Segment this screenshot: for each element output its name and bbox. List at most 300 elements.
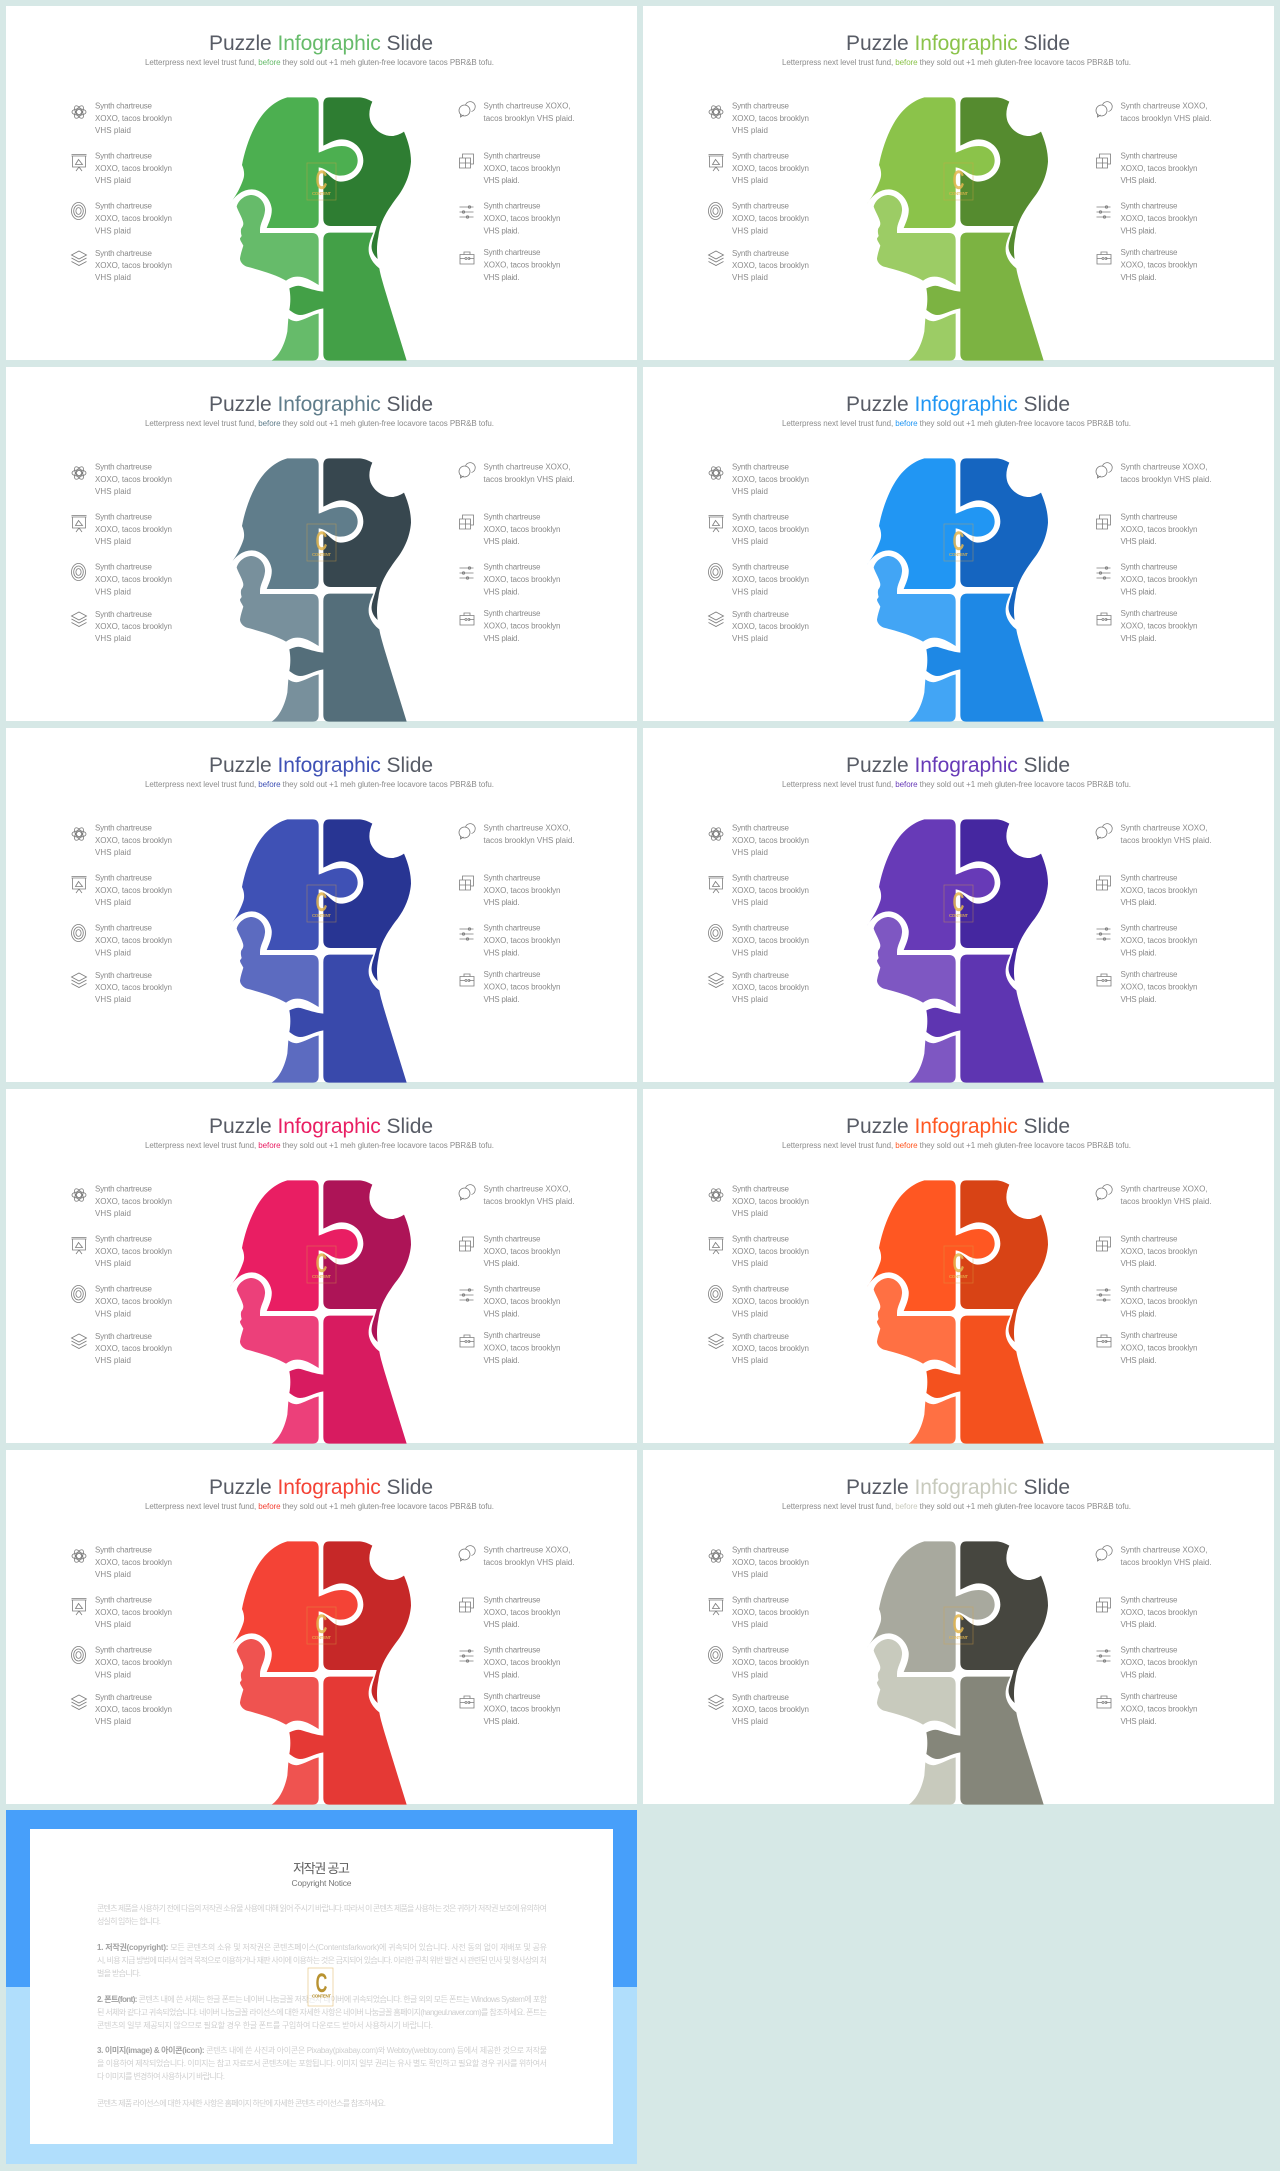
right item 2: XOXO, tacos brooklyn (484, 886, 560, 895)
right item 2: XOXO, tacos brooklyn (1120, 525, 1198, 534)
panel: copyright notice (6, 1810, 637, 2164)
left item 2: VHS plaid (732, 1259, 768, 1268)
title: Puzzle Infographic Slide (846, 32, 1070, 55)
right item 4: Synth chartreuse (1120, 1692, 1178, 1701)
left item 3: XOXO, tacos brooklyn (732, 1658, 809, 1667)
right item 2 (1096, 152, 1198, 185)
left item 3: VHS plaid (732, 1670, 768, 1680)
left item 2 (708, 874, 809, 907)
right item 3: Synth chartreuse (484, 202, 541, 210)
left item 4 (708, 610, 809, 643)
left item 2: Synth chartreuse (732, 512, 790, 522)
right item 1: tacos brooklyn VHS plaid. (1120, 1558, 1212, 1567)
watermark: CONTENT (312, 552, 331, 557)
subtitle: Letterpress next level trust fund, before they sold out +1 meh gluten-free locavore tacos PBR&B tofu. (145, 780, 494, 789)
panel: slide 7 pink (6, 1089, 637, 1444)
right item 1: Synth chartreuse XOXO, (484, 1546, 570, 1554)
right item 2 (1096, 1596, 1198, 1629)
left item 1 (72, 102, 172, 135)
left item 3: XOXO, tacos brooklyn (732, 1297, 809, 1306)
subtitle: Letterpress next level trust fund, before they sold out +1 meh gluten-free locavore tacos PBR&B tofu. (782, 58, 1131, 67)
left item 3: XOXO, tacos brooklyn (95, 214, 172, 223)
left item 1: XOXO, tacos brooklyn (732, 475, 809, 484)
watermark (944, 1607, 973, 1644)
right item 2: Synth chartreuse (484, 1596, 541, 1604)
left item 4 (708, 249, 809, 282)
right item 1 (459, 824, 574, 845)
left item 2: XOXO, tacos brooklyn (95, 1247, 172, 1256)
right item 4: VHS plaid. (1120, 995, 1156, 1004)
right item 1: Synth chartreuse XOXO, (484, 462, 570, 472)
left item 1: Synth chartreuse (95, 102, 153, 110)
left item 2: XOXO, tacos brooklyn (732, 1608, 809, 1617)
watermark: CONTENT (949, 552, 968, 557)
left item 1: Synth chartreuse (95, 1184, 153, 1194)
left item 4: Synth chartreuse (732, 610, 790, 619)
notice section 3: 을 이용하여 제작되었습니다. 이미지는 참고 자료로서 콘텐츠에는 포함됩니다. 이미지 일부 권리는 유사 별도 확인하고 필요할 경우 귀사를 위하여서 (97, 2058, 547, 2068)
left item 2 (708, 512, 809, 546)
right item 3 (1096, 1284, 1198, 1318)
right item 4: Synth chartreuse (484, 1331, 541, 1340)
left item 4: XOXO, tacos brooklyn (732, 1705, 809, 1714)
left item 1 (72, 1184, 172, 1218)
left item 2: Synth chartreuse (732, 874, 790, 882)
right item 4: Synth chartreuse (484, 1692, 541, 1701)
panel: slide 5 indigo (6, 728, 637, 1083)
subtitle: Letterpress next level trust fund, before they sold out +1 meh gluten-free locavore tacos PBR&B tofu. (782, 780, 1131, 789)
right item 4: XOXO, tacos brooklyn (1120, 982, 1198, 992)
right item 4: Synth chartreuse (484, 609, 541, 618)
right item 2: XOXO, tacos brooklyn (1120, 164, 1198, 173)
right item 3: Synth chartreuse (1120, 924, 1178, 932)
left item 4 (72, 1332, 172, 1365)
left item 1 (72, 824, 172, 857)
title: Puzzle Infographic Slide (209, 1115, 433, 1138)
right item 4 (460, 1331, 560, 1365)
right item 4: VHS plaid. (1120, 1717, 1156, 1726)
right item 1 (459, 102, 574, 123)
head puzzle (230, 458, 411, 722)
right item 4: Synth chartreuse (1120, 1331, 1178, 1340)
left item 3: Synth chartreuse (732, 924, 790, 932)
panel: slide 10 warm grey (643, 1450, 1274, 1805)
right item 3: XOXO, tacos brooklyn (1120, 936, 1198, 945)
watermark (944, 885, 973, 922)
watermark (307, 163, 336, 200)
head puzzle (867, 1180, 1048, 1444)
left item 2: VHS plaid (732, 898, 768, 907)
left item 3 (708, 924, 809, 958)
right item 1: Synth chartreuse XOXO, (484, 1184, 570, 1194)
watermark: C (953, 526, 964, 556)
right item 2: Synth chartreuse (1120, 1234, 1178, 1244)
title: Puzzle Infographic Slide (846, 393, 1070, 416)
right item 3: XOXO, tacos brooklyn (484, 1297, 560, 1306)
right item 2 (1096, 874, 1198, 907)
right item 1: tacos brooklyn VHS plaid. (1120, 475, 1212, 484)
left item 1: VHS plaid (95, 1209, 131, 1218)
left item 1 (709, 102, 809, 135)
right item 2: VHS plaid. (484, 1259, 520, 1268)
right item 3: Synth chartreuse (1120, 1284, 1178, 1294)
left item 1: VHS plaid (95, 126, 131, 135)
right item 1 (1096, 462, 1212, 484)
right item 4: XOXO, tacos brooklyn (1120, 260, 1198, 270)
left item 2: XOXO, tacos brooklyn (95, 164, 172, 173)
right item 2: VHS plaid. (484, 537, 520, 546)
subtitle: Letterpress next level trust fund, before they sold out +1 meh gluten-free locavore tacos PBR&B tofu. (145, 58, 494, 67)
left item 2 (708, 1596, 809, 1629)
right item 4: XOXO, tacos brooklyn (484, 1704, 560, 1714)
right item 3: XOXO, tacos brooklyn (1120, 1658, 1198, 1667)
left item 2: Synth chartreuse (732, 1234, 790, 1244)
left item 4: XOXO, tacos brooklyn (95, 1344, 172, 1353)
left item 1: XOXO, tacos brooklyn (732, 836, 809, 845)
right item 3: Synth chartreuse (1120, 202, 1178, 210)
watermark (307, 524, 336, 561)
watermark: CONTENT (312, 913, 331, 918)
right item 3: XOXO, tacos brooklyn (1120, 1297, 1198, 1306)
left item 1: VHS plaid (95, 848, 131, 857)
notice intro (97, 1903, 547, 1926)
left item 1: Synth chartreuse (732, 462, 790, 472)
left item 3 (72, 1284, 172, 1318)
left item 3 (72, 562, 172, 596)
watermark: CONTENT (949, 913, 968, 918)
left item 1 (709, 462, 809, 496)
title: Puzzle Infographic Slide (209, 754, 433, 777)
left item 3: VHS plaid (732, 1310, 768, 1318)
left item 4: VHS plaid (95, 1356, 131, 1365)
left item 1: VHS plaid (732, 848, 768, 857)
notice intro: 콘텐츠 제품을 사용하기 전에 다음의 저작권 소유물 사용에 대해 읽어 주시기 바랍니다. 따라서 이 콘텐츠 제품을 사용하는 것은 귀하가 저작권 보호에 유의하여 (97, 1903, 547, 1913)
right item 2: VHS plaid. (1120, 1259, 1156, 1268)
left item 1 (709, 1546, 809, 1579)
left item 4 (708, 1693, 809, 1726)
title: Puzzle Infographic Slide (846, 1115, 1070, 1138)
watermark (307, 885, 336, 922)
right item 1 (1096, 824, 1212, 845)
panel: slide 1 green (6, 6, 637, 361)
right item 4 (460, 248, 560, 282)
left item 1: XOXO, tacos brooklyn (95, 1197, 172, 1206)
right item 2 (460, 1234, 560, 1268)
left item 2: VHS plaid (95, 1620, 131, 1629)
left item 4: VHS plaid (95, 1717, 131, 1726)
left item 1: XOXO, tacos brooklyn (95, 114, 172, 123)
watermark: CONTENT (312, 1994, 331, 1998)
notice title: 저작권 공고 (293, 1861, 350, 1876)
right item 3: Synth chartreuse (484, 1646, 541, 1654)
left item 3: VHS plaid (95, 588, 131, 596)
title: Puzzle Infographic Slide (209, 32, 433, 55)
left item 3: Synth chartreuse (95, 924, 153, 932)
right item 1: tacos brooklyn VHS plaid. (484, 836, 574, 845)
right item 2 (460, 874, 560, 907)
right item 3: XOXO, tacos brooklyn (1120, 214, 1198, 223)
left item 3 (72, 924, 172, 958)
right item 4 (1097, 609, 1198, 643)
left item 3: Synth chartreuse (732, 562, 790, 572)
left item 4 (708, 971, 809, 1004)
right item 4: VHS plaid. (484, 1717, 520, 1726)
left item 1: VHS plaid (732, 1209, 768, 1218)
right item 1 (459, 1546, 574, 1567)
left item 2 (72, 152, 172, 185)
watermark: C (316, 1609, 327, 1639)
watermark: CONTENT (949, 191, 968, 196)
right item 2: XOXO, tacos brooklyn (484, 525, 560, 534)
left item 2: Synth chartreuse (95, 512, 153, 522)
right item 4 (1097, 1331, 1198, 1365)
right item 2 (460, 512, 560, 546)
notice intro: 성실히 임하는 합니다. (97, 1916, 161, 1926)
notice section 3 (97, 2045, 547, 2081)
left item 1: VHS plaid (732, 126, 768, 135)
left item 3 (72, 202, 172, 236)
left item 1: VHS plaid (95, 487, 131, 496)
right item 3: VHS plaid. (1120, 948, 1156, 958)
right item 2: VHS plaid. (484, 1620, 520, 1629)
right item 3: VHS plaid. (1120, 588, 1156, 596)
left item 4 (72, 1693, 172, 1726)
right item 4 (460, 609, 560, 643)
left item 1: XOXO, tacos brooklyn (732, 114, 809, 123)
right item 1: Synth chartreuse XOXO, (1120, 462, 1208, 472)
right item 1 (459, 1184, 574, 1206)
left item 2: VHS plaid (732, 537, 768, 546)
left item 4: XOXO, tacos brooklyn (732, 622, 809, 631)
title: Puzzle Infographic Slide (846, 754, 1070, 777)
right item 1: Synth chartreuse XOXO, (1120, 1184, 1208, 1194)
notice section 2 (97, 1994, 548, 2030)
right item 2: XOXO, tacos brooklyn (1120, 1608, 1198, 1617)
right item 3: VHS plaid. (484, 588, 520, 596)
left item 2: VHS plaid (95, 537, 131, 546)
subtitle: Letterpress next level trust fund, before they sold out +1 meh gluten-free locavore tacos PBR&B tofu. (145, 419, 494, 428)
right item 2: Synth chartreuse (1120, 152, 1178, 160)
left item 3: XOXO, tacos brooklyn (95, 1297, 172, 1306)
left item 1 (709, 824, 809, 857)
left item 1: Synth chartreuse (732, 102, 790, 110)
right item 4: Synth chartreuse (1120, 248, 1178, 257)
left item 2: Synth chartreuse (732, 152, 790, 160)
right item 2: VHS plaid. (1120, 898, 1156, 907)
watermark: C (953, 1609, 964, 1639)
right item 4: VHS plaid. (484, 995, 520, 1004)
left item 2: Synth chartreuse (95, 1234, 153, 1244)
left item 3 (708, 562, 809, 596)
left item 3: Synth chartreuse (95, 1646, 153, 1654)
left item 4: VHS plaid (732, 273, 768, 282)
right item 1: Synth chartreuse XOXO, (1120, 102, 1208, 110)
watermark: CONTENT (949, 1635, 968, 1640)
head puzzle (867, 458, 1048, 722)
left item 1 (72, 462, 172, 496)
right item 3: VHS plaid. (1120, 1310, 1156, 1318)
right item 1: tacos brooklyn VHS plaid. (1120, 1197, 1212, 1206)
left item 3 (72, 1646, 172, 1680)
right item 3 (460, 924, 560, 958)
watermark: C (316, 526, 327, 556)
right item 2: XOXO, tacos brooklyn (484, 1608, 560, 1617)
right item 4: Synth chartreuse (1120, 970, 1178, 979)
left item 2: VHS plaid (95, 898, 131, 907)
head puzzle (230, 1180, 411, 1444)
left item 4: Synth chartreuse (732, 1693, 790, 1702)
left item 4: Synth chartreuse (95, 610, 153, 619)
right item 1: tacos brooklyn VHS plaid. (484, 114, 574, 123)
left item 2: VHS plaid (95, 1259, 131, 1268)
left item 3 (708, 1284, 809, 1318)
subtitle: Letterpress next level trust fund, before they sold out +1 meh gluten-free locavore tacos PBR&B tofu. (782, 1502, 1131, 1511)
right item 1: Synth chartreuse XOXO, (484, 102, 570, 110)
notice section 1: 벌을 받습니다. (97, 1968, 141, 1978)
left item 3: VHS plaid (732, 226, 768, 236)
right item 1: tacos brooklyn VHS plaid. (484, 475, 574, 484)
notice section 1: 1. 저작권(copyright): 모든 콘텐츠의 소유 및 저작권은 콘텐츠페이스(Contentsfarkwork)에 귀속되어 있습니다. 사전 동의 없이 재배포 및 공유 (97, 1942, 547, 1952)
left item 3: Synth chartreuse (732, 1646, 790, 1654)
right item 2: XOXO, tacos brooklyn (1120, 1247, 1198, 1256)
right item 4: Synth chartreuse (1120, 609, 1178, 618)
right item 2: VHS plaid. (1120, 537, 1156, 546)
right item 4 (1097, 1692, 1198, 1726)
watermark: C (953, 887, 964, 917)
left item 2: VHS plaid (732, 176, 768, 185)
left item 4: Synth chartreuse (732, 249, 790, 258)
right item 3 (1096, 1646, 1198, 1680)
left item 1: Synth chartreuse (95, 1546, 153, 1554)
left item 4: VHS plaid (732, 995, 768, 1004)
right item 1 (1096, 1184, 1212, 1206)
left item 1: Synth chartreuse (95, 824, 153, 832)
notice section 2: 2. 폰트(font): 콘텐츠 내에 쓴 서체는 한글 폰트는 네이버 나눔글꼴 저작권자 네이버에 귀속되었습니다. 한글 외의 모든 폰트는 Windows System에 포함 (97, 1994, 548, 2004)
left item 4: XOXO, tacos brooklyn (732, 983, 809, 992)
right item 3: VHS plaid. (484, 1310, 520, 1318)
left item 4 (72, 610, 172, 643)
left item 1 (709, 1184, 809, 1218)
right item 4: VHS plaid. (1120, 273, 1156, 282)
right item 4: XOXO, tacos brooklyn (1120, 1344, 1198, 1352)
right item 1 (459, 462, 574, 484)
left item 3: Synth chartreuse (732, 202, 790, 210)
panel: slide 6 deep purple (643, 728, 1274, 1083)
left item 2 (708, 1234, 809, 1268)
left item 1: Synth chartreuse (732, 1184, 790, 1194)
left item 2: XOXO, tacos brooklyn (732, 164, 809, 173)
right item 4: VHS plaid. (484, 634, 520, 643)
subtitle: Letterpress next level trust fund, before they sold out +1 meh gluten-free locavore tacos PBR&B tofu. (145, 1141, 494, 1150)
left item 4: Synth chartreuse (95, 1332, 153, 1341)
left item 2: XOXO, tacos brooklyn (732, 886, 809, 895)
right item 1 (1096, 1546, 1212, 1567)
right item 3 (460, 562, 560, 596)
left item 4: XOXO, tacos brooklyn (95, 261, 172, 270)
right item 3: XOXO, tacos brooklyn (484, 575, 560, 584)
left item 3: VHS plaid (95, 948, 131, 958)
left item 4: VHS plaid (95, 995, 131, 1004)
right item 1: tacos brooklyn VHS plaid. (1120, 114, 1212, 123)
watermark (307, 1246, 336, 1283)
left item 1: VHS plaid (95, 1570, 131, 1579)
notice section 2: 된 서체와 같다고 귀속되었습니다. 네이버 나눔글꼴 라이선스에 대한 자세한 사항은 네이버 나눔글꼴 홈페이지(hangeul.naver.com)를 참조하세요. 폰트는 (97, 2007, 547, 2017)
right item 3 (1096, 924, 1198, 958)
left item 3: Synth chartreuse (95, 202, 153, 210)
left item 4: XOXO, tacos brooklyn (95, 983, 172, 992)
notice section 3: 다 이미지를 변경하여 사용하시기 바랍니다. (97, 2071, 225, 2081)
left item 3: XOXO, tacos brooklyn (95, 936, 172, 945)
head puzzle (230, 819, 411, 1083)
right item 4: VHS plaid. (484, 273, 520, 282)
watermark: CONTENT (949, 1274, 968, 1279)
panel: slide 9 red (6, 1450, 637, 1805)
left item 2: Synth chartreuse (95, 1596, 153, 1604)
right item 4: XOXO, tacos brooklyn (484, 982, 560, 992)
right item 2: Synth chartreuse (484, 152, 541, 160)
right item 2 (1096, 512, 1198, 546)
right item 3: XOXO, tacos brooklyn (484, 936, 560, 945)
right item 3: Synth chartreuse (484, 1284, 541, 1294)
left item 2 (72, 512, 172, 546)
right item 1: tacos brooklyn VHS plaid. (1120, 836, 1212, 845)
right item 2: XOXO, tacos brooklyn (484, 164, 560, 173)
left item 1: XOXO, tacos brooklyn (95, 1558, 172, 1567)
watermark (307, 1607, 336, 1644)
right item 3: Synth chartreuse (484, 924, 541, 932)
watermark: C (953, 165, 964, 195)
left item 4: Synth chartreuse (95, 971, 153, 980)
left item 1 (72, 1546, 172, 1579)
panel: slide 8 deep orange (643, 1089, 1274, 1444)
right item 1: Synth chartreuse XOXO, (1120, 1546, 1208, 1554)
left item 4: Synth chartreuse (732, 1332, 790, 1341)
watermark (944, 524, 973, 561)
right item 2: VHS plaid. (484, 176, 520, 185)
left item 4: XOXO, tacos brooklyn (732, 261, 809, 270)
right item 2: Synth chartreuse (1120, 1596, 1178, 1604)
left item 4 (708, 1332, 809, 1365)
notice section 2: 콘텐츠의 일부 제공되지 않으므로 필요할 경우 한글 폰트를 구입하여 다운로드 받아서 사용하시기 바랍니다. (97, 2020, 433, 2030)
right item 3: XOXO, tacos brooklyn (484, 1658, 560, 1667)
left item 2 (72, 1596, 172, 1629)
right item 3: XOXO, tacos brooklyn (1120, 575, 1198, 584)
right item 3 (460, 1646, 560, 1680)
left item 3: VHS plaid (95, 226, 131, 236)
right item 2: XOXO, tacos brooklyn (1120, 886, 1198, 895)
right item 3 (460, 202, 560, 236)
left item 2 (72, 874, 172, 907)
left item 4: XOXO, tacos brooklyn (732, 1344, 809, 1353)
right item 2: Synth chartreuse (1120, 874, 1178, 882)
panel: slide 4 blue (643, 367, 1274, 722)
right item 4 (460, 1692, 560, 1726)
head puzzle (867, 97, 1048, 361)
left item 1: XOXO, tacos brooklyn (95, 475, 172, 484)
left item 4: XOXO, tacos brooklyn (95, 1705, 172, 1714)
right item 3: Synth chartreuse (1120, 562, 1178, 572)
right item 3: VHS plaid. (484, 226, 520, 236)
head puzzle (867, 1541, 1048, 1805)
right item 4: VHS plaid. (1120, 1356, 1156, 1365)
left item 1: XOXO, tacos brooklyn (732, 1558, 809, 1567)
panel: slide 3 blue grey (6, 367, 637, 722)
left item 3 (708, 1646, 809, 1680)
notice section 1: 시, 비용 지급 방법에 따라서 엄격 목적으로 이용하거나 재판 사이에 이용하는 것은 금지되어 있습니다. 이러한 규칙 위반 발견 시 관련된 민사 및 형사상의 처 (97, 1955, 547, 1965)
right item 4: XOXO, tacos brooklyn (1120, 622, 1198, 630)
right item 1: tacos brooklyn VHS plaid. (484, 1197, 574, 1206)
left item 1: VHS plaid (732, 1570, 768, 1579)
notice subtitle: Copyright Notice (292, 1878, 352, 1888)
